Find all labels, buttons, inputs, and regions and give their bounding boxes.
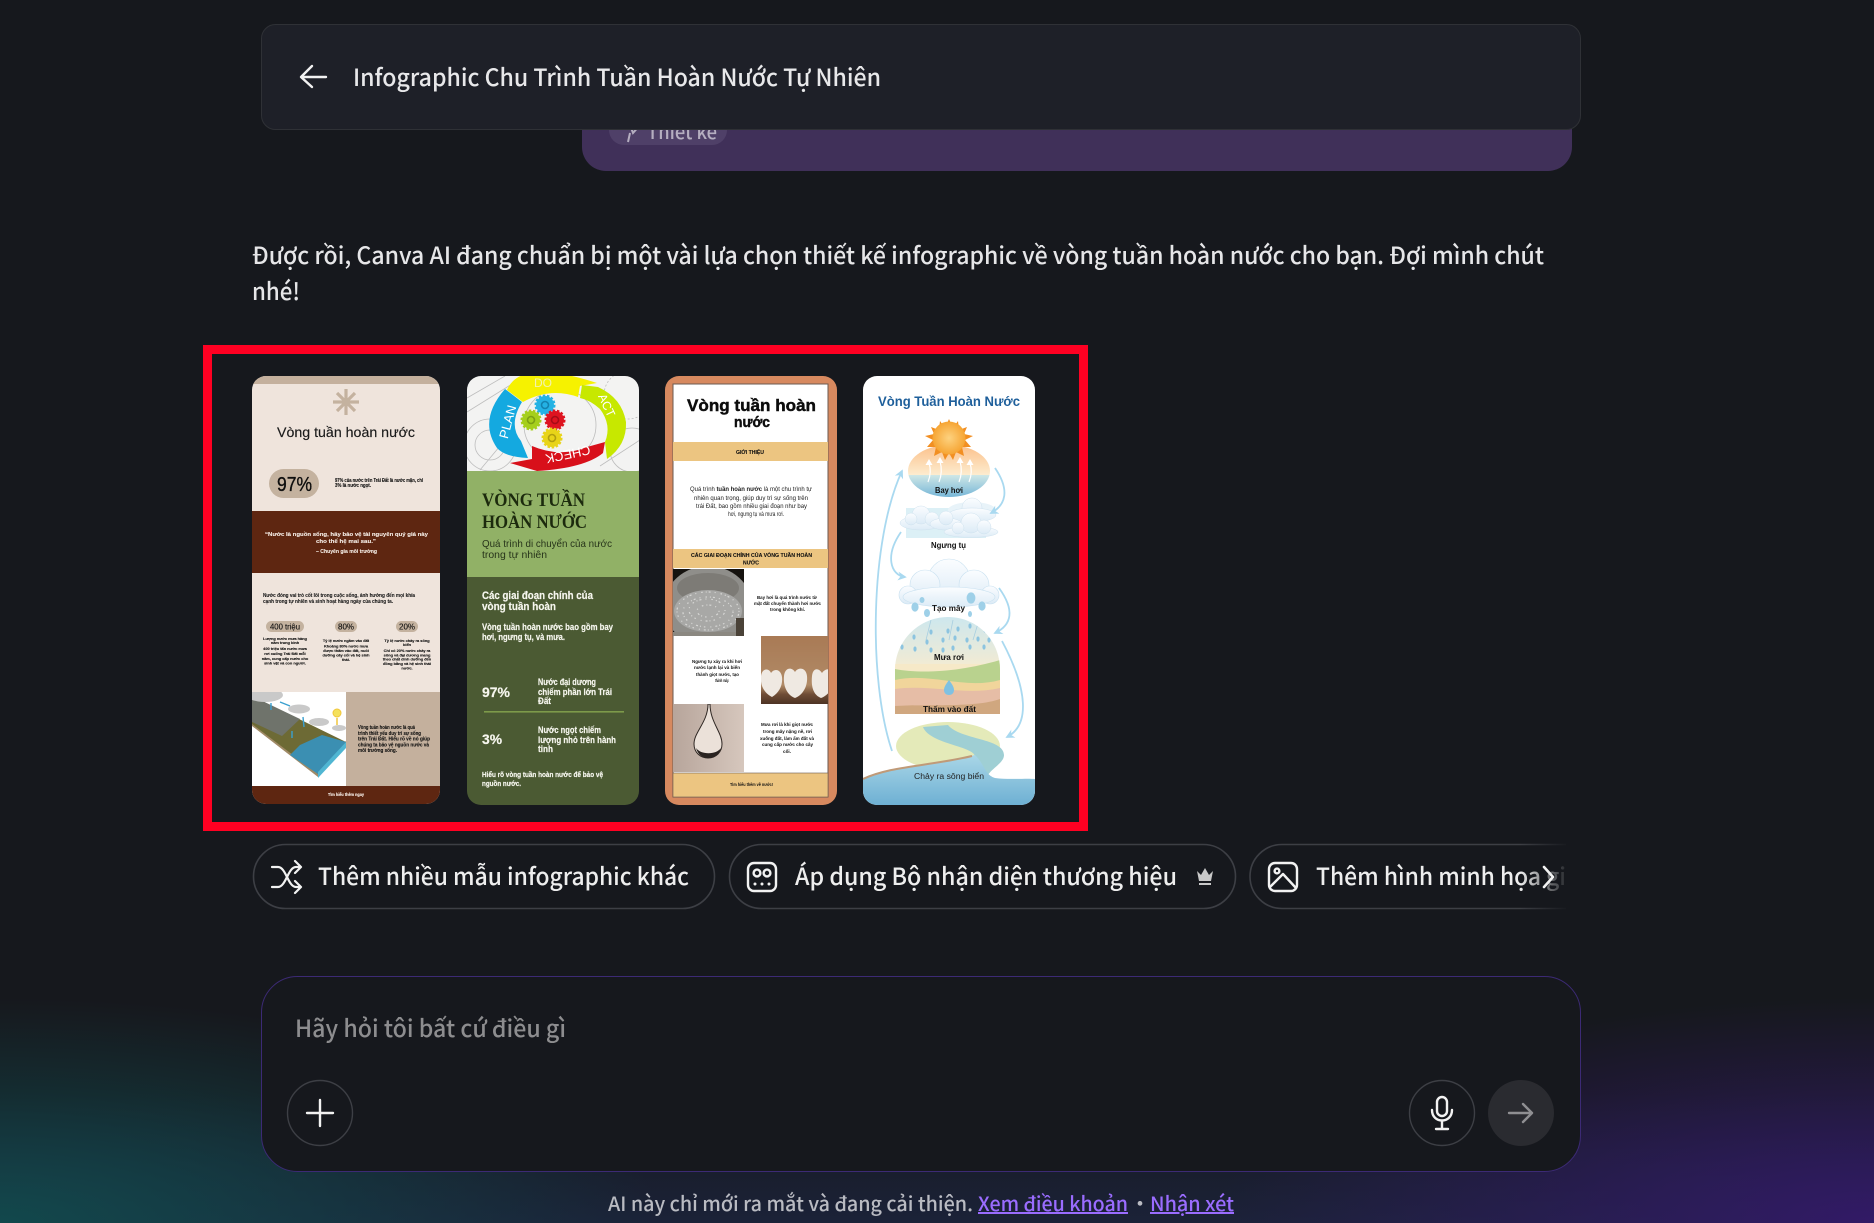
stages band	[673, 549, 828, 568]
stat pill 97%: 97%	[277, 474, 312, 496]
stage text: condensation: Ngưng tụ xảy ra khi hơi	[692, 659, 742, 664]
assistant message	[252, 236, 1544, 307]
stage text: evaporation	[754, 595, 822, 612]
stage text: rainfall: cung cấp nước cho cây	[762, 742, 814, 747]
stage: rainfall and soil: Mưa rơi	[934, 652, 964, 662]
assistant message: Được rồi, Canva AI đang chuẩn bị một vài lựa chọn thiết kế infographic về vòng tuần hoàn nước cho bạn. Đợi mình chút	[252, 236, 1544, 271]
design chip: Thiết kế	[647, 116, 718, 145]
title block: VÒNG TUẦN	[482, 489, 585, 511]
stage text: condensation: nước lạnh lại và biến	[694, 665, 740, 670]
image: boiling water pot	[673, 569, 744, 636]
intro band	[673, 442, 828, 461]
title block	[467, 471, 639, 577]
dark stages block: Vòng tuần hoàn nước bao gồm bay	[482, 622, 614, 633]
red highlight frame	[208, 350, 1084, 826]
quote band: cho thế hệ mai sau.”	[316, 538, 376, 545]
dark stages block: vòng tuần hoàn	[482, 601, 556, 613]
stage: rainfall and soil: Thấm vào đất	[923, 704, 976, 714]
stat note: 3% là nước ngọt.	[335, 483, 372, 489]
image caption panel: Vòng tuần hoàn nước là quá	[358, 725, 416, 731]
card 1 title: Vòng tuần hoàn nước	[277, 424, 415, 440]
intro text: hơi, ngưng tụ và mưa rơi.	[728, 511, 784, 518]
button: brand kit	[730, 844, 1236, 908]
image caption panel: trên Trái Đất. Hiểu rõ về nó giúp	[358, 736, 430, 742]
image: PDCA cycle: CHECK	[544, 442, 592, 467]
panel: infographic card 4 water cycle	[863, 376, 1035, 805]
button: add	[288, 1080, 352, 1146]
quote band	[252, 511, 440, 573]
intro text: nhiên quan trọng, giúp duy trì sự sống trên	[694, 495, 809, 502]
footer band: Tìm hiểu thêm về nước!	[730, 781, 773, 787]
icon: back arrow	[301, 66, 326, 87]
stat column 80%: dưỡng cây cối và hệ sinh	[322, 652, 370, 658]
disclaimer footer: •	[1130, 1188, 1150, 1217]
stat 3%: Nước ngọt chiếm	[538, 725, 601, 736]
panel: infographic card 2 green	[467, 376, 639, 805]
stat column 400 triệu: sinh vật và con người.	[264, 660, 306, 666]
image: PDCA cycle: ACT	[595, 391, 618, 420]
stage text: evaporation: trong không khí.	[770, 607, 805, 612]
stat 97%: chiếm phần lớn Trái	[538, 687, 612, 698]
image caption panel	[346, 692, 440, 786]
dark stages block: Các giai đoạn chính của	[482, 590, 594, 602]
stat column 20%	[383, 621, 432, 670]
disclaimer footer: AI này chỉ mới ra mắt và đang cải thiện.	[608, 1188, 973, 1217]
stat column 80%	[322, 621, 370, 662]
intro text: Nước đóng vai trò cốt lõi trong cuộc sống, ảnh hưởng đến mọi khía	[263, 592, 416, 599]
disclaimer footer	[608, 1188, 1234, 1217]
stat pill 97%	[269, 469, 319, 498]
image: PDCA cycle: DO	[534, 376, 552, 390]
footer band: Tìm hiểu thêm ngay	[328, 791, 364, 797]
stages band: CÁC GIAI ĐOẠN CHÍNH CỦA VÒNG TUẦN HOÀN	[691, 551, 812, 559]
panel: infographic card 1 brown	[247, 376, 440, 804]
image: water droplet	[673, 704, 744, 772]
disclaimer footer: Xem điều khoản	[978, 1188, 1128, 1217]
stage text: rainfall: xuống đất, làm ẩm đất và	[760, 736, 815, 741]
stat column 400 triệu: Lượng nước mưa hàng	[263, 636, 308, 641]
intro band: GIỚI THIỆU	[736, 448, 764, 456]
stat column 80%: Tỷ lệ nước ngầm vào đất	[323, 638, 370, 643]
stat column 400 triệu: rơi xuống Trái Đất mỗi	[264, 651, 306, 656]
stage text: condensation	[692, 659, 742, 683]
stat column 400 triệu: 400 triệu	[270, 622, 300, 632]
stat column 400 triệu	[262, 621, 309, 666]
stat column 20%: sông và đại dương mang	[384, 652, 431, 658]
stat column 80%: thái.	[342, 657, 350, 662]
intro text	[263, 592, 416, 605]
card 4 title: Vòng Tuần Hoàn Nước	[878, 393, 1020, 409]
placeholder text: Hãy hỏi tôi bất cứ điều gì	[295, 1009, 566, 1044]
design chip	[609, 115, 727, 145]
icon: asterisk	[333, 389, 359, 415]
card 3 title	[687, 396, 816, 431]
icon: crown	[1197, 868, 1213, 885]
stage: evaporation	[908, 419, 990, 497]
button: more templates: Thêm nhiều mẫu infographic khác	[318, 857, 689, 892]
stage text: condensation: thành mây.	[715, 678, 729, 683]
icon: chevron	[1544, 867, 1553, 887]
stat column 20%: nước.	[401, 666, 413, 670]
dark stages block: nguồn nước.	[482, 779, 521, 788]
stat column 80%: Khoảng 80% nước mưa	[324, 644, 369, 648]
footer band	[252, 786, 440, 804]
stat 97%	[482, 678, 612, 704]
quote band: – Chuyên gia môi trường	[316, 549, 378, 555]
image: white hearts on wood	[761, 636, 834, 704]
stat note: 97% của nước trên Trái Đất là nước mặn, chỉ	[335, 477, 424, 484]
button: send	[1488, 1080, 1554, 1146]
card 3 title: nước	[734, 414, 770, 431]
stat column 400 triệu: năm, cung cấp nước cho	[262, 656, 309, 661]
stage text: evaporation: mặt đất chuyển thành hơi nước	[754, 601, 822, 606]
stat 97%: Đất	[538, 696, 552, 707]
image: PDCA cycle	[467, 376, 639, 471]
intro text: trái Đất, bao gồm nhiều giai đoạn như bay	[696, 503, 808, 510]
page title: Infographic Chu Trình Tuần Hoàn Nước Tự Nhiên	[353, 58, 881, 93]
stat column 400 triệu: 400 triệu tấn nước mưa	[263, 646, 308, 651]
image caption panel: trình thiết yếu duy trì sự sống	[358, 730, 421, 737]
stage text: rainfall	[760, 722, 815, 754]
chat input box	[262, 976, 1580, 1172]
stage text: rainfall: trong mây nặng nề, rơi	[763, 729, 812, 734]
stat 3%: 3%	[482, 731, 503, 747]
user message bubble	[582, 115, 1572, 171]
stage text: evaporation: Bay hơi là quá trình nước từ	[757, 595, 818, 600]
stage: rainfall and soil	[895, 617, 1000, 714]
image caption panel: môi trường sống.	[358, 747, 397, 754]
intro text: Quá trình tuần hoàn nước là một chu trình tự	[690, 486, 812, 493]
stat 3%: lượng nhỏ trên hành	[538, 735, 616, 746]
stat column 20%: biển	[403, 642, 412, 647]
button: more templates	[254, 844, 714, 908]
icon: shuffle	[272, 861, 301, 893]
button: microphone	[1410, 1080, 1474, 1146]
dark stages block: Hiểu rõ vòng tuần hoàn nước để bảo vệ	[482, 770, 603, 779]
icon: brand kit	[748, 863, 776, 891]
stat column 400 triệu: năm trung bình	[271, 640, 300, 645]
stat column 20%: đồng bằng và hệ sinh thái	[383, 661, 431, 666]
stat 3%: tinh	[538, 744, 553, 755]
stat column 80%: được thấm vào đất, nuôi	[323, 648, 369, 653]
stages band: NƯỚC	[743, 558, 759, 566]
dark stages block: hơi, ngưng tụ, và mưa.	[482, 632, 565, 643]
intro text: cạnh trong tự nhiên và sinh hoạt hàng ngày của chúng ta.	[263, 599, 393, 605]
stage: cloud formation	[899, 559, 999, 617]
footer band	[673, 773, 828, 797]
quote band: “Nước là nguồn sống, hãy bảo vệ tài nguyên quý giá này	[265, 531, 429, 538]
stat 97%: 97%	[482, 684, 511, 700]
image caption panel: chúng ta bảo vệ nguồn nước và	[358, 742, 430, 748]
image: PDCA cycle: PLAN	[496, 403, 519, 440]
stage: evaporation: Bay hơi	[935, 485, 963, 495]
stat 3%	[482, 726, 616, 752]
stat column 20%: Chỉ có 20% nước chảy ra	[384, 648, 431, 653]
stage text: rainfall: cối.	[783, 749, 791, 754]
title block: Quá trình di chuyển của nước	[482, 538, 612, 550]
stage: cloud formation: Tạo mây	[932, 603, 965, 613]
stat column 20%: theo chất dinh dưỡng đến	[383, 656, 432, 662]
disclaimer footer: Nhận xét	[1150, 1188, 1234, 1217]
image: water cycle terrain block	[247, 688, 346, 786]
stat column 20%: 20%	[399, 622, 415, 632]
icon: image	[1269, 863, 1297, 891]
stat column 80%: 80%	[338, 622, 354, 632]
dark stages block	[467, 577, 639, 805]
button: brand kit: Áp dụng Bộ nhận diện thương hiệu	[795, 857, 1177, 892]
stage: river to sea	[863, 722, 1035, 805]
intro text	[690, 486, 812, 518]
header bar	[262, 24, 1580, 130]
title block: HOÀN NƯỚC	[482, 511, 587, 533]
stage: condensation	[900, 498, 998, 550]
title block: trong tự nhiên	[482, 549, 547, 561]
stage: river to sea: Chảy ra sông biển	[914, 771, 984, 781]
stage text: rainfall: Mưa rơi là khi giọt nước	[761, 722, 814, 727]
panel: infographic card 3 orange	[664, 376, 837, 805]
cycle arrows	[876, 468, 1023, 751]
assistant message: nhé!	[252, 272, 300, 307]
button: add illustrations: Thêm hình minh họa gi	[1316, 857, 1566, 892]
stage: condensation: Ngưng tụ	[931, 540, 966, 550]
stat column 20%: Tỷ lệ nước chảy ra sông	[384, 638, 430, 643]
stage text: condensation: thành giọt nước, tạo	[696, 672, 739, 677]
stat 97%: Nước đại dương	[538, 677, 596, 688]
card 3 title: Vòng tuần hoàn	[687, 396, 816, 415]
stat note	[335, 477, 424, 489]
button: add illustrations	[1250, 842, 1570, 912]
